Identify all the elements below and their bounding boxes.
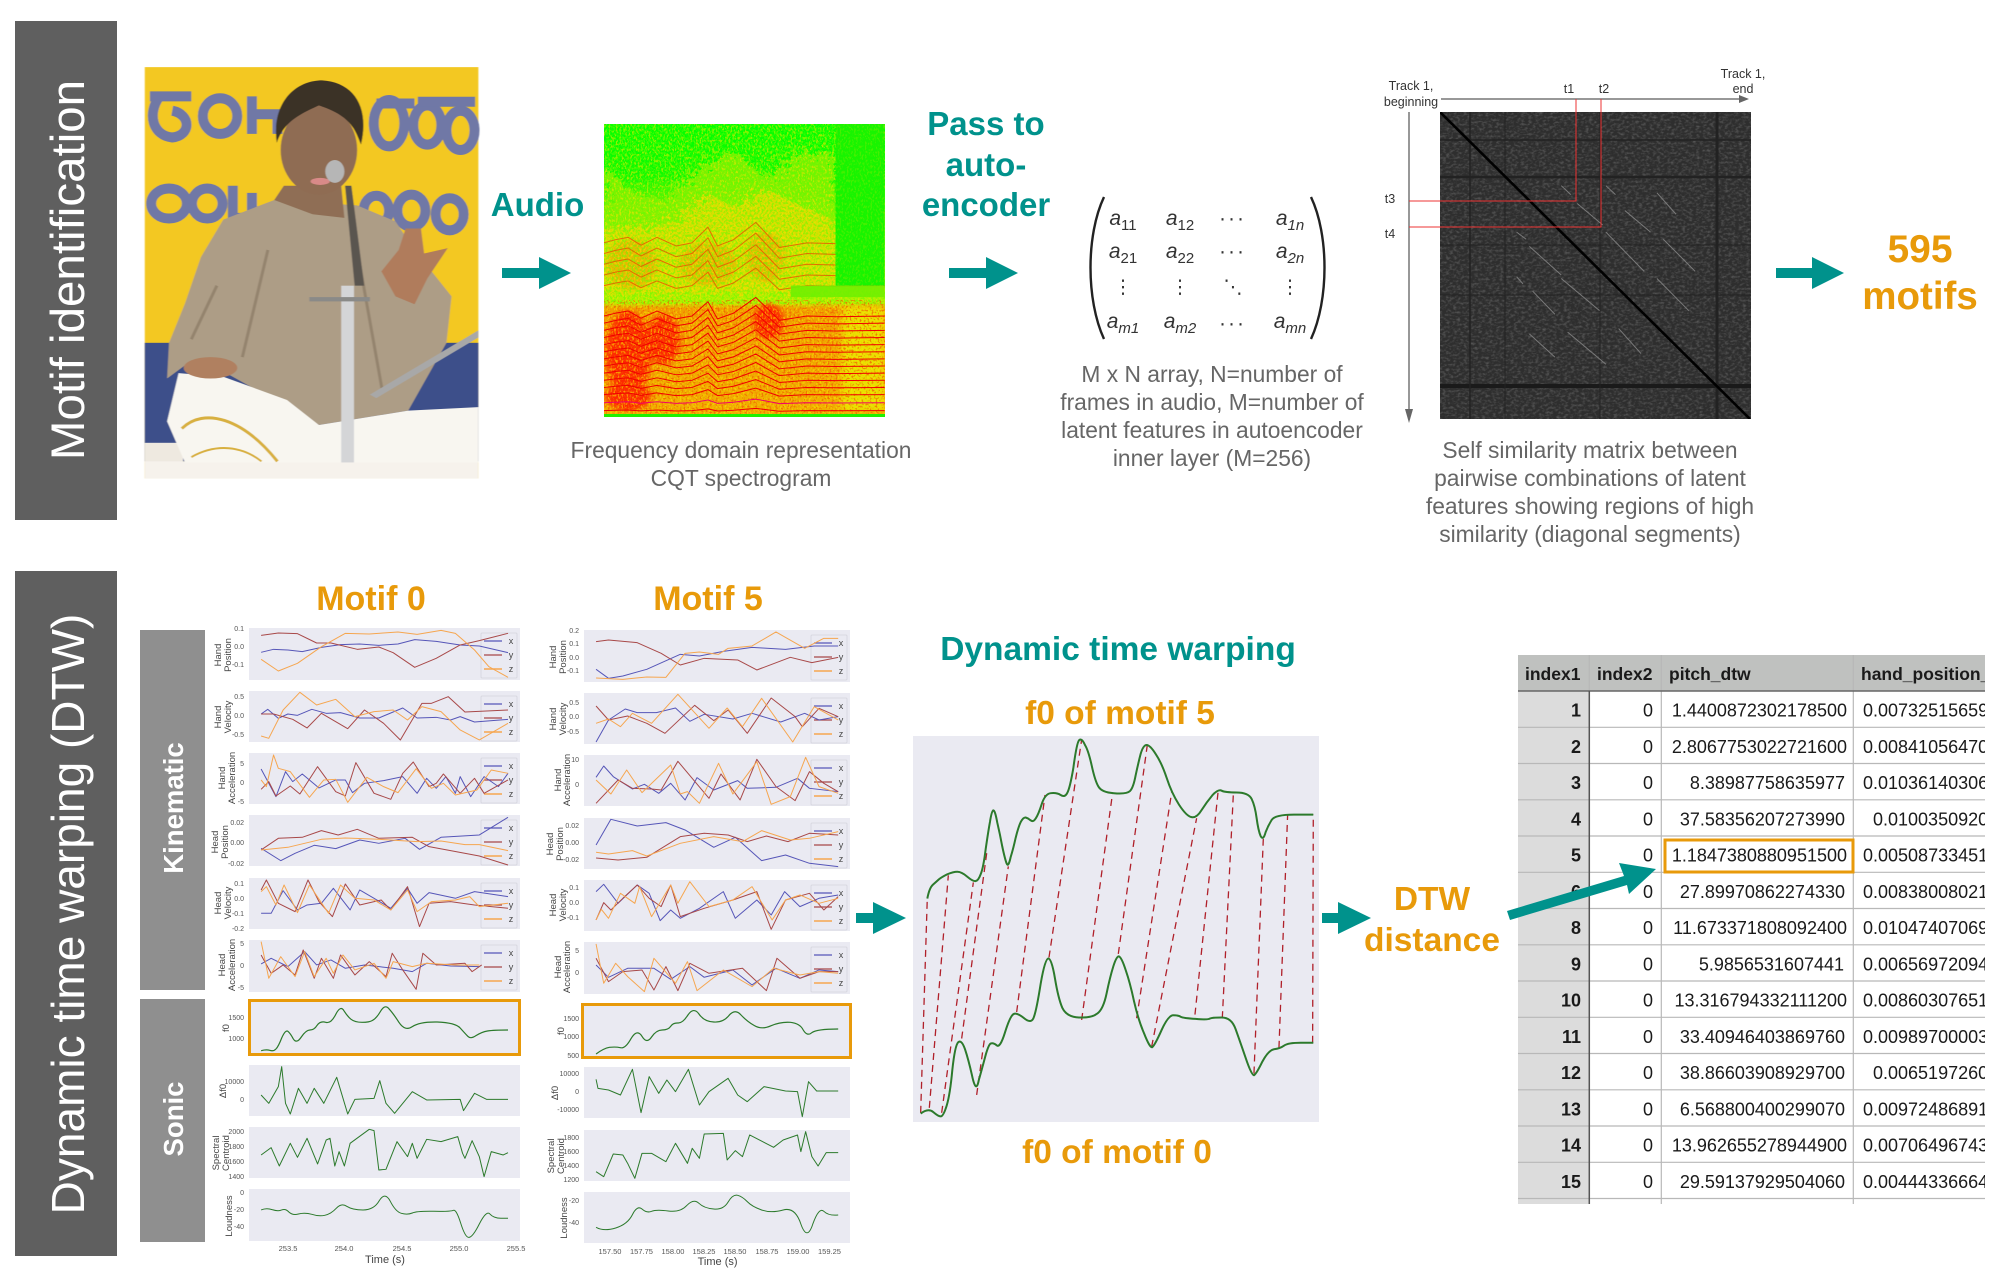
caption: matrix: inner layer (M=256) bbox=[1113, 445, 1311, 471]
arrow: warping to distance bbox=[1322, 902, 1371, 934]
label: f0 of motif 5: f0 of motif 5 bbox=[1025, 695, 1215, 732]
arrow: spectrogram to autoencoder bbox=[949, 257, 1018, 289]
matrix: M x N array: a bbox=[1109, 207, 1121, 230]
matrix: M x N array: 11 bbox=[1121, 217, 1137, 234]
caption: spectrogram: CQT spectrogram bbox=[651, 465, 831, 491]
axis ticks motif 0: 0 bbox=[240, 1190, 244, 1197]
caption: spectrogram bbox=[571, 437, 911, 491]
label: audio: Audio bbox=[491, 186, 584, 223]
group label: kinematic bbox=[140, 630, 205, 990]
matrix: M x N array: 1n bbox=[1288, 217, 1304, 234]
axis ticks motif 0: 0.1 bbox=[234, 881, 244, 888]
axis ticks motif 5: -0.1 bbox=[567, 668, 579, 675]
axis labels motif 0: Hand bbox=[213, 706, 224, 728]
axis ticks motif 5: 158.75 bbox=[756, 1247, 778, 1256]
caption: self similarity matrix: pairwise combinations of latent bbox=[1434, 465, 1747, 491]
axes and t1-t4 markers: beginning bbox=[1384, 95, 1438, 109]
axis labels motif 0: Velocity bbox=[223, 886, 234, 919]
photo: singer performing bbox=[145, 67, 478, 479]
table rows: 14 bbox=[1561, 1136, 1581, 1156]
caption: spectrogram: Frequency domain representation bbox=[571, 437, 911, 463]
heading: motif identification: Motif identification bbox=[42, 80, 95, 460]
table rows: 0 bbox=[1643, 1136, 1653, 1156]
axes and t1-t4 markers: end bbox=[1733, 82, 1753, 96]
panel: motif identification side label bbox=[15, 21, 117, 520]
axes and t1-t4 markers: Track 1, bbox=[1721, 67, 1765, 81]
table rows: 0 bbox=[1643, 1172, 1653, 1192]
axis ticks motif 5: 0.0 bbox=[569, 655, 579, 662]
table rows: 11.673371808092400 bbox=[1673, 918, 1847, 938]
chart: dynamic time warping alignment bbox=[913, 736, 1319, 1122]
axis ticks motif 5: 0 bbox=[575, 1089, 579, 1096]
axis ticks motif 5: -40 bbox=[569, 1220, 579, 1227]
axis labels motif 0: Spectral bbox=[211, 1136, 222, 1170]
axis ticks motif 0: 0.0 bbox=[234, 644, 244, 651]
axis ticks motif 0: -0.1 bbox=[232, 662, 244, 669]
axis labels motif 5: Centroid bbox=[556, 1138, 567, 1174]
table rows: 13.316794332111200 bbox=[1674, 991, 1847, 1011]
axis ticks motif 5: 0.2 bbox=[569, 628, 579, 635]
axis ticks motif 5: 1500 bbox=[563, 1016, 579, 1023]
kinematic curves motif 5 bbox=[596, 632, 838, 992]
table rows: 29.59137929504060 bbox=[1680, 1172, 1845, 1192]
table rows: 15 bbox=[1561, 1172, 1581, 1192]
axis labels motif 5: Spectral bbox=[546, 1139, 557, 1173]
axis labels motif 5: Position bbox=[558, 640, 569, 674]
table rows: 13 bbox=[1561, 1099, 1581, 1119]
axis ticks motif 0: -40 bbox=[234, 1224, 244, 1231]
result: 595 motifs: 595 bbox=[1887, 228, 1953, 271]
matrix: M x N array: mn bbox=[1285, 320, 1306, 337]
table rows: 0 bbox=[1643, 991, 1653, 1011]
table rows: 37.58356207273990 bbox=[1680, 809, 1845, 829]
axis labels motif 5: Head bbox=[545, 833, 556, 855]
caption: matrix: latent features in autoencoder bbox=[1061, 417, 1363, 443]
axis ticks motif 0: -0.2 bbox=[232, 926, 244, 933]
matrix: M x N array: 12 bbox=[1178, 217, 1194, 234]
arrow: audio to spectrogram bbox=[502, 257, 571, 289]
axis labels motif 5: Δf0 bbox=[550, 1086, 561, 1100]
axis ticks motif 5: 159.00 bbox=[787, 1247, 809, 1256]
label: pass to autoencoder: Pass to bbox=[927, 105, 1045, 142]
charts: motif 5 kinematic and sonic bbox=[545, 628, 850, 1268]
caption: matrix: M x N array, N=number of bbox=[1081, 361, 1343, 387]
axis ticks motif 0: 0.02 bbox=[230, 820, 244, 827]
axis ticks motif 5: 0.1 bbox=[569, 885, 579, 892]
matrix: M x N array: ⋮ bbox=[1280, 276, 1300, 298]
axis labels motif 5: Velocity bbox=[558, 702, 569, 735]
label: pass to autoencoder bbox=[922, 105, 1050, 223]
table rows: 0.0100350920 bbox=[1873, 809, 1988, 829]
table header: index1 bbox=[1525, 664, 1581, 684]
axis ticks motif 0: 0.5 bbox=[234, 694, 244, 701]
axis ticks motif 5: -0.1 bbox=[567, 915, 579, 922]
axis labels motif 0: Velocity bbox=[223, 700, 234, 733]
label: pass to autoencoder: auto- bbox=[946, 146, 1026, 183]
axis ticks motif 5: 0.00 bbox=[565, 840, 579, 847]
axis labels motif 5: Hand bbox=[548, 708, 559, 730]
axis labels motif 0: Acceleration bbox=[227, 752, 238, 804]
axis ticks motif 0: 254.5 bbox=[393, 1244, 411, 1253]
axis ticks motif 5: 10 bbox=[571, 757, 579, 764]
label: pass to autoencoder: encoder bbox=[922, 186, 1050, 223]
matrix: M x N array: a bbox=[1107, 310, 1118, 333]
table rows: 0.00989700003 bbox=[1863, 1027, 1988, 1047]
axis labels motif 0: Acceleration bbox=[227, 939, 238, 991]
panel: dynamic time warping side label bbox=[15, 571, 117, 1256]
caption: matrix: frames in audio, M=number of bbox=[1060, 389, 1364, 415]
axis labels motif 0: Loudness bbox=[224, 1195, 235, 1237]
axes and t1-t4 markers: t1 bbox=[1564, 82, 1574, 96]
axis ticks motif 5: 10000 bbox=[560, 1071, 579, 1078]
matrix: M x N array bbox=[1090, 197, 1324, 339]
table rows: 0.00508733451 bbox=[1863, 846, 1988, 866]
label: DTW distance: distance bbox=[1364, 922, 1500, 959]
matrix: M x N array: a bbox=[1166, 207, 1178, 230]
kinematic curves motif 0 bbox=[261, 630, 508, 989]
axis ticks motif 0 bbox=[225, 626, 525, 1266]
matrix: M x N array: ⋮ bbox=[1114, 276, 1132, 298]
heading: dynamic time warping: Dynamic time warping (DTW) bbox=[42, 614, 94, 1214]
label: f0 of motif 0: f0 of motif 0 bbox=[1022, 1134, 1212, 1171]
matrix: M x N array: m2 bbox=[1175, 320, 1197, 337]
axis labels motif 0: Δf0 bbox=[218, 1084, 229, 1098]
table rows: 5.9856531607441 bbox=[1699, 954, 1844, 974]
axis ticks motif 5: 1400 bbox=[563, 1163, 579, 1170]
axis ticks motif 5: -0.02 bbox=[563, 857, 579, 864]
axis labels motif 5: f0 bbox=[556, 1027, 567, 1035]
axis ticks motif 0: 0.0 bbox=[234, 896, 244, 903]
axis labels motif 0: Head bbox=[210, 831, 221, 853]
axis ticks motif 0: -0.1 bbox=[232, 911, 244, 918]
table: pairwise DTW distances bbox=[1518, 655, 2000, 1204]
table rows: 0.00732515659 bbox=[1863, 701, 1988, 721]
highlighted cell bbox=[1665, 840, 1853, 872]
table rows: 0.0065197260 bbox=[1873, 1063, 1988, 1083]
table rows: 12 bbox=[1561, 1063, 1581, 1083]
axis ticks motif 5: 1800 bbox=[563, 1135, 579, 1142]
axis ticks motif 0: 0 bbox=[240, 1097, 244, 1104]
axes and t1-t4 markers: Track 1, bbox=[1389, 79, 1433, 93]
axis ticks motif 5: -10000 bbox=[557, 1107, 579, 1114]
arrow: matrix to motifs bbox=[1776, 257, 1844, 289]
axis ticks motif 0: 0.1 bbox=[234, 626, 244, 633]
axis ticks motif 5: 0.0 bbox=[569, 714, 579, 721]
axis labels motif 5: Acceleration bbox=[562, 754, 573, 806]
table rows: 0.00444336664 bbox=[1863, 1172, 1988, 1192]
table rows: 0 bbox=[1643, 1027, 1653, 1047]
table rows: 8 bbox=[1571, 918, 1581, 938]
matrix: M x N array: ⋮ bbox=[1170, 276, 1190, 298]
table rows: 0 bbox=[1643, 773, 1653, 793]
table rows: 0.00972486891 bbox=[1863, 1099, 1988, 1119]
axis ticks motif 5: 0 bbox=[575, 782, 579, 789]
axis ticks motif 0: 0.0 bbox=[234, 713, 244, 720]
matrix: M x N array: 22 bbox=[1178, 250, 1194, 267]
axis ticks motif 0: 253.5 bbox=[279, 1244, 297, 1253]
arrow: plots to dynamic time warping bbox=[856, 902, 906, 934]
axis ticks motif 5: 158.50 bbox=[724, 1247, 746, 1256]
matrix: M x N array: a bbox=[1276, 207, 1288, 230]
table rows: 27.89970862274330 bbox=[1680, 882, 1845, 902]
axes and t1-t4 markers: t2 bbox=[1599, 82, 1609, 96]
table rows: 38.86603908929700 bbox=[1680, 1063, 1845, 1083]
axis ticks motif 0: 255.5 bbox=[507, 1244, 525, 1253]
axis ticks motif 5: -0.5 bbox=[567, 729, 579, 736]
axis ticks motif 5: 0.0 bbox=[569, 900, 579, 907]
axis labels motif 0: Position bbox=[220, 825, 231, 859]
matrix: M x N array: ··· bbox=[1219, 314, 1247, 336]
axis labels motif 0: Centroid bbox=[221, 1135, 232, 1171]
axis labels motif 0: Position bbox=[223, 638, 234, 672]
axis ticks motif 5: 0.1 bbox=[569, 641, 579, 648]
axis ticks motif 5: 158.00 bbox=[662, 1247, 684, 1256]
axis labels motif 5: Head bbox=[553, 956, 564, 978]
charts: motif 0 kinematic and sonic bbox=[210, 626, 525, 1266]
result: 595 motifs bbox=[1862, 228, 1978, 318]
matrix: M x N array: a bbox=[1166, 240, 1178, 263]
axis ticks motif 0: 1400 bbox=[228, 1174, 244, 1181]
table rows: 0 bbox=[1643, 918, 1653, 938]
table header bbox=[1526, 667, 1985, 684]
axis ticks motif 0: 0 bbox=[240, 963, 244, 970]
table rows: 5 bbox=[1571, 846, 1581, 866]
axis ticks motif 5: 1200 bbox=[563, 1177, 579, 1184]
table rows: 1.1847380880951500 bbox=[1672, 846, 1847, 866]
axis ticks motif 0: 0 bbox=[240, 780, 244, 787]
table rows: 1 bbox=[1571, 701, 1581, 721]
table rows: 2.8067753022721600 bbox=[1672, 737, 1847, 757]
matrix: M x N array: m1 bbox=[1118, 320, 1139, 337]
axis labels motif 0: Hand bbox=[213, 644, 224, 666]
table rows: 0 bbox=[1643, 882, 1653, 902]
matrix: M x N array: a bbox=[1274, 310, 1285, 333]
caption: self similarity matrix: Self similarity matrix between bbox=[1442, 437, 1738, 463]
axis ticks motif 0: 1800 bbox=[228, 1144, 244, 1151]
table rows: 13.962655278944900 bbox=[1672, 1136, 1847, 1156]
table rows: 0.01047407069 bbox=[1863, 918, 1988, 938]
self similarity matrix bbox=[1384, 67, 1765, 423]
axis labels motif 0: Head bbox=[217, 954, 228, 976]
label: DTW distance: DTW bbox=[1394, 881, 1471, 918]
table rows: 0.00656972094 bbox=[1863, 954, 1988, 974]
heading: motif 0: Motif 0 bbox=[316, 580, 426, 618]
matrix: M x N array: 2n bbox=[1286, 250, 1304, 267]
table header: pitch_dtw bbox=[1669, 664, 1751, 684]
table rows: 0 bbox=[1643, 1063, 1653, 1083]
axis labels motif 0: Hand bbox=[217, 767, 228, 789]
axis ticks motif 0: 5 bbox=[240, 761, 244, 768]
table rows: 6.568800400299070 bbox=[1680, 1099, 1845, 1119]
axis ticks motif 5: 0 bbox=[575, 970, 579, 977]
table rows: 0 bbox=[1643, 737, 1653, 757]
axis ticks motif 0: 0.00 bbox=[230, 840, 244, 847]
table rows: 0.00860307651 bbox=[1863, 991, 1988, 1011]
axis labels motif 0: Head bbox=[213, 892, 224, 914]
matrix: M x N array: ··· bbox=[1219, 242, 1247, 264]
arrow: distance to table cell bbox=[1507, 863, 1656, 920]
matrix: M x N array: 21 bbox=[1120, 250, 1137, 267]
axis labels motif 5: Hand bbox=[553, 769, 564, 791]
result: 595 motifs: motifs bbox=[1862, 275, 1978, 318]
axis ticks motif 0: 255.0 bbox=[450, 1244, 468, 1253]
table rows: 10 bbox=[1561, 991, 1581, 1011]
table rows: 0 bbox=[1643, 1099, 1653, 1119]
group label: sonic bbox=[140, 999, 205, 1242]
axis ticks motif 5: 1000 bbox=[563, 1034, 579, 1041]
highlighted f0 plot motif 5 bbox=[582, 1004, 850, 1058]
axes and t1-t4 markers: t4 bbox=[1385, 227, 1395, 241]
table rows: 0 bbox=[1643, 701, 1653, 721]
axis labels motif 5: Acceleration bbox=[562, 941, 573, 993]
table rows: 0 bbox=[1643, 809, 1653, 829]
label: DTW distance bbox=[1364, 881, 1500, 959]
table rows: 4 bbox=[1571, 809, 1581, 829]
caption: self similarity matrix bbox=[1426, 437, 1754, 547]
spectrogram: CQT bbox=[604, 124, 885, 417]
axis ticks motif 0: -20 bbox=[234, 1207, 244, 1214]
sonic curves motif 5 bbox=[596, 1011, 838, 1233]
table rows: 9 bbox=[1571, 954, 1581, 974]
axis ticks motif 5: -20 bbox=[569, 1198, 579, 1205]
table rows: 2 bbox=[1571, 737, 1581, 757]
axis ticks motif 5: 0.02 bbox=[565, 823, 579, 830]
table rows: 0 bbox=[1643, 846, 1653, 866]
table rows: 0.00838008021 bbox=[1863, 882, 1988, 902]
group label: sonic: Sonic bbox=[158, 1082, 189, 1156]
axis ticks motif 5: 5 bbox=[575, 948, 579, 955]
axis ticks motif 5: 157.50 bbox=[599, 1247, 621, 1256]
axes and t1-t4 markers bbox=[1384, 67, 1765, 423]
axis ticks motif 0: 5 bbox=[240, 941, 244, 948]
table header: index2 bbox=[1597, 664, 1653, 684]
axis labels motif 0: f0 bbox=[221, 1024, 232, 1032]
axis ticks motif 0: 1500 bbox=[228, 1015, 244, 1022]
caption: self similarity matrix: similarity (diagonal segments) bbox=[1439, 521, 1741, 547]
axis labels motif 5: Head bbox=[548, 894, 559, 916]
axes and t1-t4 markers: t3 bbox=[1385, 192, 1395, 206]
table rows: 6 bbox=[1571, 882, 1581, 902]
axis labels motif 5: Velocity bbox=[558, 888, 569, 921]
table rows: 1.4400872302178500 bbox=[1672, 701, 1847, 721]
axis ticks motif 0: 254.0 bbox=[335, 1244, 353, 1253]
matrix: M x N array: a bbox=[1276, 240, 1288, 263]
table rows: 8.38987758635977 bbox=[1690, 773, 1845, 793]
axis ticks motif 0: 1000 bbox=[228, 1036, 244, 1043]
table rows: 0.00706496743 bbox=[1863, 1136, 1988, 1156]
matrix: M x N array: ⋱ bbox=[1224, 276, 1242, 298]
axis ticks motif 5: Time (s) bbox=[698, 1256, 738, 1268]
axis ticks motif 5 bbox=[557, 628, 841, 1268]
axis ticks motif 0: -0.02 bbox=[228, 861, 244, 868]
axis labels motif 5: Position bbox=[555, 827, 566, 861]
axis ticks motif 5: 0.5 bbox=[569, 700, 579, 707]
axis ticks motif 5: 1600 bbox=[563, 1149, 579, 1156]
table rows: 11 bbox=[1562, 1027, 1581, 1047]
axis labels motif 5: Hand bbox=[548, 646, 559, 668]
axis ticks motif 0: -0.5 bbox=[232, 732, 244, 739]
table rows: 0.00841056470 bbox=[1863, 737, 1988, 757]
table rows bbox=[1561, 701, 1988, 1192]
highlighted f0 plot motif 0 bbox=[250, 1000, 520, 1054]
matrix: M x N array: a bbox=[1109, 240, 1120, 263]
axis ticks motif 0: -5 bbox=[238, 799, 244, 806]
table rows: 3 bbox=[1571, 773, 1581, 793]
caption: matrix bbox=[1060, 361, 1364, 471]
axis ticks motif 5: 158.25 bbox=[693, 1247, 715, 1256]
heading: dynamic time warping: Dynamic time warping bbox=[940, 631, 1296, 668]
heading: motif 5: Motif 5 bbox=[653, 580, 763, 618]
axis ticks motif 0: -5 bbox=[238, 985, 244, 992]
matrix: M x N array: a bbox=[1164, 310, 1175, 333]
table rows: 33.40946403869760 bbox=[1680, 1027, 1845, 1047]
axis ticks motif 0: 2000 bbox=[228, 1129, 244, 1136]
axis labels motif 5: Loudness bbox=[559, 1197, 570, 1239]
axis ticks motif 0: 10000 bbox=[225, 1079, 244, 1086]
axis ticks motif 5: 159.25 bbox=[818, 1247, 841, 1256]
caption: self similarity matrix: features showing regions of high bbox=[1426, 493, 1754, 519]
table rows: 0 bbox=[1643, 954, 1653, 974]
axis labels motif 0 bbox=[210, 638, 238, 1237]
axis labels motif 5 bbox=[545, 640, 573, 1239]
axis ticks motif 5: 500 bbox=[567, 1053, 579, 1060]
table rows: 0.01036140306 bbox=[1863, 773, 1988, 793]
matrix: M x N array: ··· bbox=[1219, 209, 1247, 231]
axis ticks motif 5: 157.75 bbox=[630, 1247, 653, 1256]
axis ticks motif 0: 1600 bbox=[228, 1159, 244, 1166]
sonic curves motif 0 bbox=[261, 1007, 508, 1237]
axis ticks motif 0: Time (s) bbox=[365, 1254, 405, 1266]
group label: kinematic: Kinematic bbox=[158, 742, 189, 874]
